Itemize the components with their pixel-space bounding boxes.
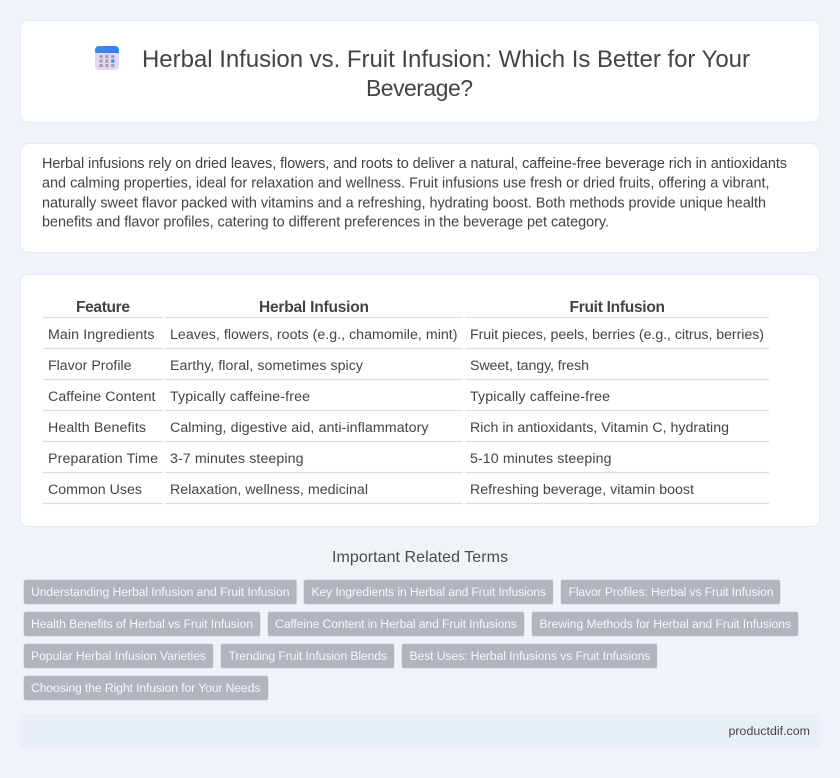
row: health benefits: Rich in antioxidants, Vitamin C, hydrating — [470, 420, 729, 436]
tag — [24, 580, 297, 604]
panel: introduction text: benefits and flavor profiles, catering to different preferences in the beverage pet category. — [42, 214, 609, 230]
row: flavor profile: Sweet, tangy, fresh — [470, 358, 589, 374]
title: Herbal Infusion vs. Fruit Infusion: Which Is Better for Your — [142, 46, 750, 73]
row: common uses — [48, 482, 694, 498]
panel: introduction text: Herbal infusions rely on dried leaves, flowers, and roots to deliver a natural, caffeine-free beverage rich in antioxidants — [42, 156, 787, 172]
tag: Understanding Herbal Infusion and Fruit Infusion — [31, 585, 290, 599]
tag: Health Benefits of Herbal vs Fruit Infusion — [31, 617, 253, 631]
panel: title header — [20, 20, 820, 122]
row: flavor profile: Earthy, floral, sometimes spicy — [170, 358, 364, 374]
row: flavor profile — [48, 358, 589, 374]
table header — [76, 299, 665, 316]
row: caffeine content — [48, 389, 610, 405]
tag — [268, 612, 524, 636]
footer — [20, 714, 820, 748]
table header: Fruit Infusion — [570, 299, 665, 316]
tag — [24, 676, 268, 700]
tag: Popular Herbal Infusion Varieties — [31, 649, 206, 663]
row: caffeine content: Caffeine Content — [48, 389, 156, 405]
tag: Flavor Profiles: Herbal vs Fruit Infusion — [568, 585, 774, 599]
row: common uses: Common Uses — [48, 482, 142, 498]
tag — [24, 644, 214, 668]
row: caffeine content: Typically caffeine-free — [470, 389, 610, 405]
panel: introduction text: naturally sweet flavor packed with vitamins and a refreshing, hydrating boost. Both methods provide unique health — [42, 196, 766, 212]
heading: related terms: Important Related Terms — [332, 549, 508, 566]
title: Beverage? — [366, 75, 473, 101]
tag — [220, 644, 394, 668]
table header: Herbal Infusion — [259, 299, 369, 316]
table header: Feature — [76, 299, 130, 316]
row: health benefits: Health Benefits — [48, 420, 146, 436]
title — [142, 46, 750, 101]
tag: Best Uses: Herbal Infusions vs Fruit Infusions — [410, 649, 650, 663]
icon: calendar — [95, 46, 119, 70]
row: main ingredients: Main Ingredients — [48, 327, 154, 343]
row: preparation time — [48, 451, 612, 467]
row: main ingredients — [48, 327, 764, 343]
tag: Trending Fruit Infusion Blends — [228, 649, 387, 663]
panel: introduction text: and calming properties, ideal for relaxation and wellness. Fruit infusions use fresh or dried fruits, offering a vibrant, — [42, 176, 770, 192]
row: common uses: Refreshing beverage, vitamin boost — [470, 482, 694, 498]
tag: Choosing the Right Infusion for Your Needs — [31, 681, 260, 695]
row: preparation time: 5-10 minutes steeping — [470, 451, 612, 467]
row: main ingredients: Leaves, flowers, roots (e.g., chamomile, mint) — [170, 327, 458, 343]
row: preparation time: Preparation Time — [48, 451, 158, 467]
panel: introduction text — [20, 144, 820, 252]
row: flavor profile: Flavor Profile — [48, 358, 132, 374]
tag — [304, 580, 554, 604]
row: caffeine content: Typically caffeine-free — [170, 389, 310, 405]
tag — [532, 612, 798, 636]
tag: Caffeine Content in Herbal and Fruit Infusions — [275, 617, 517, 631]
tag — [402, 644, 658, 668]
row: preparation time: 3-7 minutes steeping — [170, 451, 304, 467]
row: common uses: Relaxation, wellness, medicinal — [170, 482, 368, 498]
row: health benefits: Calming, digestive aid, anti-inflammatory — [170, 420, 429, 436]
panel: comparison table — [20, 274, 820, 526]
tag: Key Ingredients in Herbal and Fruit Infusions — [312, 585, 546, 599]
tag — [560, 580, 780, 604]
row: main ingredients: Fruit pieces, peels, berries (e.g., citrus, berries) — [470, 327, 764, 343]
tag: Brewing Methods for Herbal and Fruit Infusions — [540, 617, 791, 631]
tag — [24, 612, 260, 636]
footer: productdif.com — [728, 724, 810, 738]
tags: related terms — [24, 580, 798, 700]
row: health benefits — [48, 420, 729, 436]
